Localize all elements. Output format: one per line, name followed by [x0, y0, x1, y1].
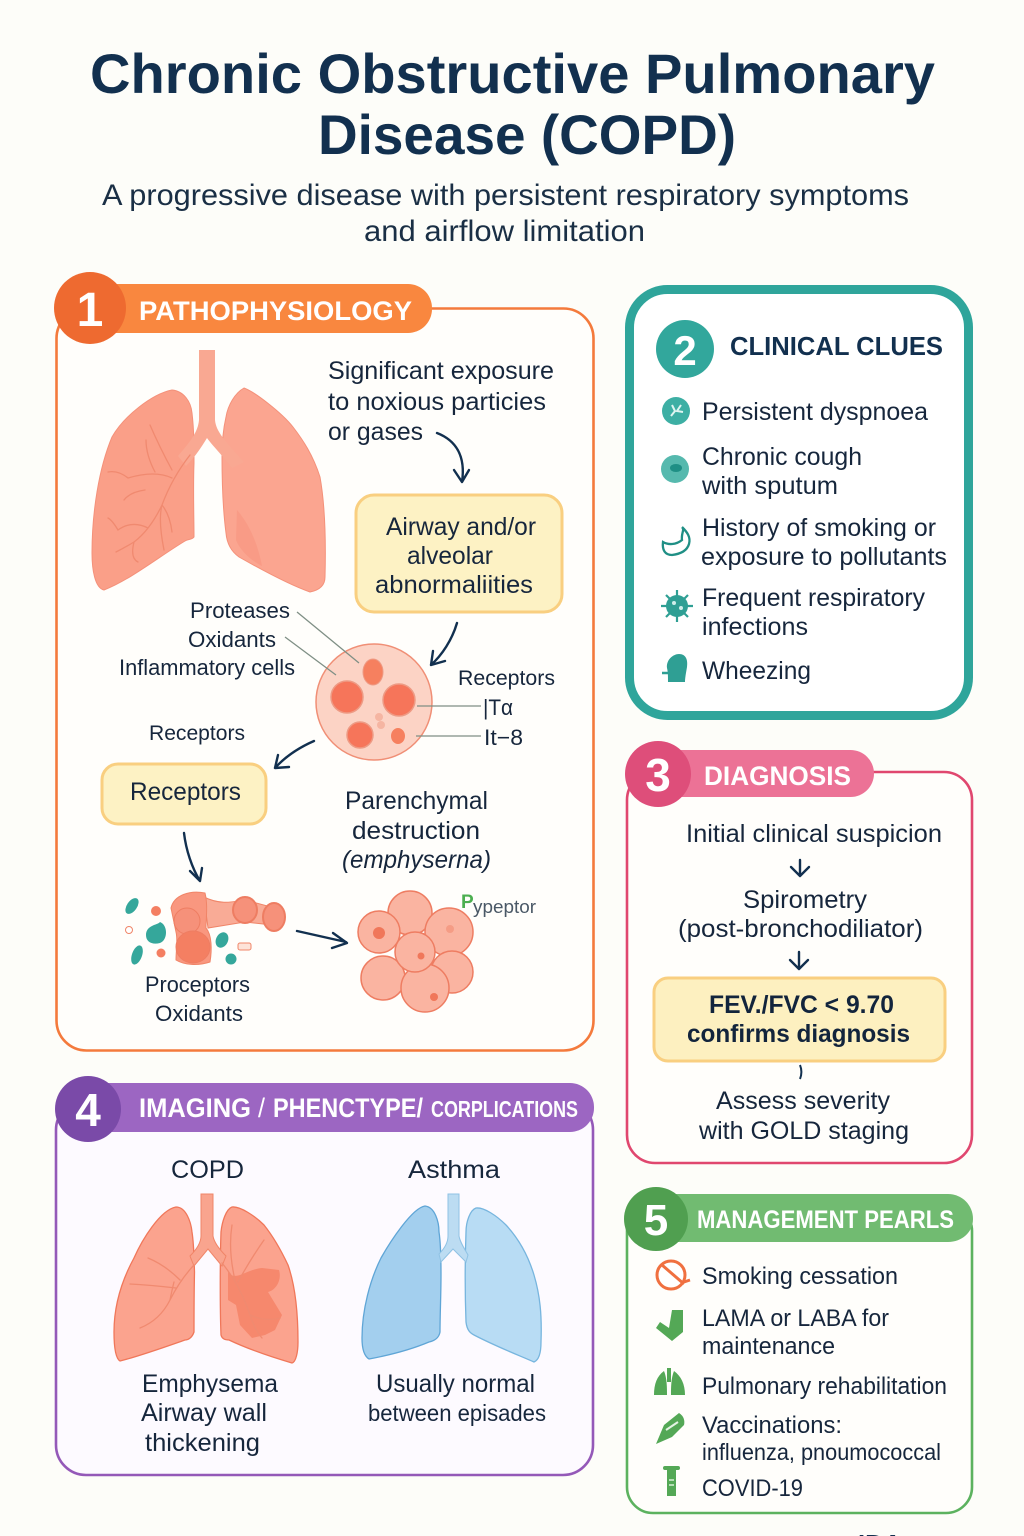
text: parenchymal destruction: (emphyserna) — [342, 846, 491, 874]
header: management — [624, 1187, 973, 1251]
header: imaging: PHENCTYPE/ — [273, 1093, 423, 1123]
header: management: 5 — [644, 1196, 668, 1245]
item: wheezing: Wheezing — [702, 657, 811, 685]
labels: cytokines — [458, 666, 555, 750]
item: rehabilitation: Pulmonary rehabilitation — [702, 1373, 947, 1400]
label: proceptors: Oxidants — [155, 1001, 243, 1026]
box: airway abnormalities: abnormaliities — [375, 571, 533, 599]
header: clinical clues: CLINICAL CLUES — [730, 331, 943, 361]
header: imaging: CORPLICATIONS — [431, 1096, 578, 1122]
label: pypeptor — [461, 892, 536, 917]
box: receptors: Receptors — [130, 778, 241, 806]
text: exposure: Significant exposure — [328, 357, 554, 385]
leader lines — [285, 612, 481, 736]
column: asthma: Usually normal — [376, 1370, 535, 1398]
item: LAMA LABA — [656, 1305, 889, 1360]
header: clinical clues: 2 — [673, 327, 697, 374]
header: imaging: IMAGING — [139, 1093, 251, 1123]
text: parenchymal destruction: Parenchymal — [345, 787, 488, 815]
item: infections: Frequent respiratory — [702, 584, 925, 612]
item: wheezing — [662, 654, 811, 685]
labels: mediators: Proteases — [190, 598, 290, 623]
arrow: abnormalities to cell — [431, 623, 457, 665]
subtitle — [102, 179, 909, 248]
panel: diagnosis — [625, 741, 972, 1163]
item: smoking cessation: Smoking cessation — [702, 1263, 898, 1290]
header: pathophysiology: PATHOPHYSIOLOGY — [139, 296, 412, 326]
label: proceptors — [145, 972, 250, 1026]
labels: cytokines: |Tα — [483, 695, 513, 720]
panel: imaging — [55, 1076, 594, 1475]
label: receptors: Receptors — [149, 721, 245, 745]
label: pypeptor: P — [461, 892, 474, 913]
arrow: spirometry to criterion — [790, 952, 808, 969]
header: diagnosis: 3 — [645, 749, 671, 801]
title: Disease (COPD) — [318, 103, 736, 166]
header: imaging: / — [258, 1093, 265, 1123]
arrow: airway to alveoli — [297, 931, 347, 948]
header: imaging: 4 — [75, 1084, 101, 1136]
box: airway abnormalities: alveolar — [407, 542, 493, 570]
box: diagnostic criterion: confirms diagnosis — [687, 1020, 910, 1048]
header: pathophysiology — [54, 272, 432, 344]
arrow: receptors to airway — [184, 833, 202, 881]
item: dyspnoea: Persistent dyspnoea — [702, 398, 928, 426]
label: proceptors: Proceptors — [145, 972, 250, 997]
arrow: exposure to abnormalities — [437, 433, 469, 482]
column: COPD: COPD — [171, 1156, 244, 1184]
label: pypeptor: ypeptor — [473, 897, 536, 917]
item: vaccinations — [656, 1412, 941, 1465]
header: diagnosis: DIAGNOSIS — [704, 761, 851, 791]
illustration: damaged airway — [123, 892, 285, 966]
item: COVID-19 — [663, 1466, 803, 1502]
box: diagnostic criterion: FEV./FVC < 9.70 — [709, 991, 894, 1019]
subtitle: and airflow limitation — [364, 215, 645, 248]
text: spirometry: Spirometry — [743, 886, 867, 914]
text: spirometry: (post-bronchodiliator) — [678, 915, 923, 943]
column: COPD: Airway wall — [141, 1399, 267, 1427]
column: asthma: between episades — [368, 1400, 546, 1426]
labels: mediators: Oxidants — [188, 627, 276, 652]
text: spirometry — [678, 886, 923, 943]
item: rehabilitation — [654, 1368, 947, 1400]
column: COPD: Emphysema — [142, 1370, 278, 1398]
labels: mediators — [119, 598, 295, 680]
header: pathophysiology: 1 — [77, 284, 103, 337]
illustration: inflamed cell — [316, 644, 432, 760]
connector: criterion to severity — [800, 1065, 802, 1079]
subtitle: A progressive disease with persistent respiratory symptoms — [102, 179, 909, 212]
item: smoking — [663, 514, 947, 571]
header: management: MANAGEMENT PEARLS — [697, 1206, 954, 1234]
box: receptors — [102, 764, 266, 824]
text: parenchymal destruction: destruction — [352, 817, 480, 845]
illustration: lungs — [92, 350, 325, 592]
item: cough: with sputum — [701, 472, 838, 500]
item: LAMA LABA: maintenance — [702, 1333, 835, 1360]
illustration: asthma lungs — [362, 1194, 541, 1362]
header: imaging — [55, 1076, 594, 1142]
item: infections: infections — [702, 613, 808, 641]
title — [90, 42, 935, 166]
text: exposure — [328, 357, 554, 446]
title: Chronic Obstructive Pulmonary — [90, 42, 935, 105]
item: vaccinations: Vaccinations: — [702, 1412, 842, 1439]
item: cough — [661, 443, 862, 500]
item: smoking: exposure to pollutants — [701, 543, 947, 571]
text: suspicion: Initial clinical suspicion — [686, 820, 942, 848]
box: airway abnormalities: Airway and/or — [386, 513, 536, 541]
item: LAMA LABA: LAMA or LABA for — [702, 1305, 889, 1332]
panel: clinical clues — [630, 290, 968, 716]
box: diagnostic criterion — [654, 978, 945, 1061]
labels: cytokines: It−8 — [484, 725, 523, 750]
item: smoking: History of smoking or — [702, 514, 936, 542]
text: severity — [698, 1087, 909, 1145]
header: diagnosis — [625, 741, 874, 807]
item: COVID-19: COVID-19 — [702, 1475, 803, 1502]
labels: mediators: Inflammatory cells — [119, 655, 295, 680]
column: asthma: Asthma — [408, 1156, 500, 1184]
item: cough: Chronic cough — [702, 443, 862, 471]
arrow: suspicion to spirometry — [791, 860, 809, 876]
text: severity: with GOLD staging — [698, 1117, 909, 1145]
item: infections — [661, 584, 925, 641]
header: clinical clues — [656, 320, 943, 378]
text: severity: Assess severity — [716, 1087, 890, 1115]
box: airway abnormalities — [356, 495, 562, 612]
arrow: cell to receptors — [275, 741, 314, 768]
item: vaccinations: influenza, pnoumococcal — [702, 1439, 941, 1465]
column: COPD — [114, 1156, 298, 1457]
panel: pathophysiology — [54, 272, 594, 1050]
illustration: alveoli — [358, 891, 473, 1012]
text: exposure: to noxious particies — [328, 388, 546, 416]
text: parenchymal destruction — [342, 787, 491, 874]
text: exposure: or gases — [328, 418, 423, 446]
panel: management pearls — [624, 1187, 973, 1513]
column: COPD: thickening — [145, 1429, 260, 1457]
column: asthma — [362, 1156, 546, 1426]
illustration: COPD lungs — [114, 1194, 298, 1363]
labels: cytokines: Receptors — [458, 666, 555, 690]
